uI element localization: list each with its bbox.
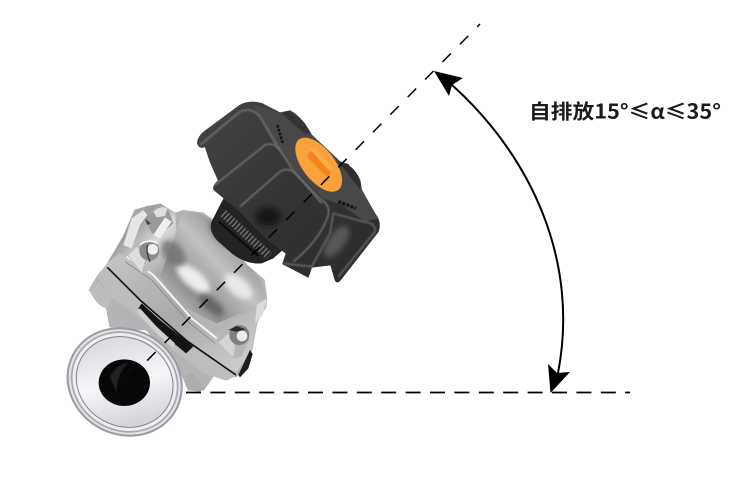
highlight	[320, 222, 354, 261]
top face	[253, 105, 378, 222]
handwheel knob	[197, 102, 379, 282]
orange cap	[286, 130, 351, 200]
lower bolt end	[184, 373, 204, 392]
bore	[99, 359, 150, 406]
valve body	[47, 204, 267, 457]
embossed mark	[338, 202, 356, 208]
dashed reference line: tilted	[125, 24, 480, 383]
orange cap highlight	[310, 147, 333, 172]
arrowhead: upper	[434, 71, 463, 96]
collar	[211, 187, 287, 264]
angle arc with arrows	[434, 71, 570, 393]
bolt: upper cap nut	[127, 241, 160, 273]
grip rib	[283, 213, 375, 277]
grip rib	[215, 144, 322, 203]
grip ribs	[200, 110, 280, 150]
metal silhouette	[89, 204, 267, 390]
grip rib	[240, 170, 329, 262]
side lug	[282, 111, 311, 135]
embossed mark	[277, 125, 283, 143]
rear clamp plate and yoke	[107, 204, 177, 277]
orange cap centre	[307, 148, 332, 177]
lower flange plate	[97, 267, 236, 381]
angle label: 自排放15°≤α≤35°	[529, 96, 721, 124]
knob outline	[197, 102, 379, 282]
bonnet dome	[160, 212, 264, 323]
upper clamp plate	[98, 253, 267, 372]
arrowhead: lower	[548, 364, 570, 393]
recessed shadow	[256, 207, 281, 226]
bolt: lower cap nut	[217, 325, 250, 358]
dashed reference line: horizontal	[186, 392, 630, 394]
gasket	[107, 267, 236, 375]
clamp flange	[47, 307, 202, 457]
rear bolt end	[89, 283, 113, 308]
knurled teeth	[223, 213, 269, 256]
side lug	[338, 162, 361, 189]
